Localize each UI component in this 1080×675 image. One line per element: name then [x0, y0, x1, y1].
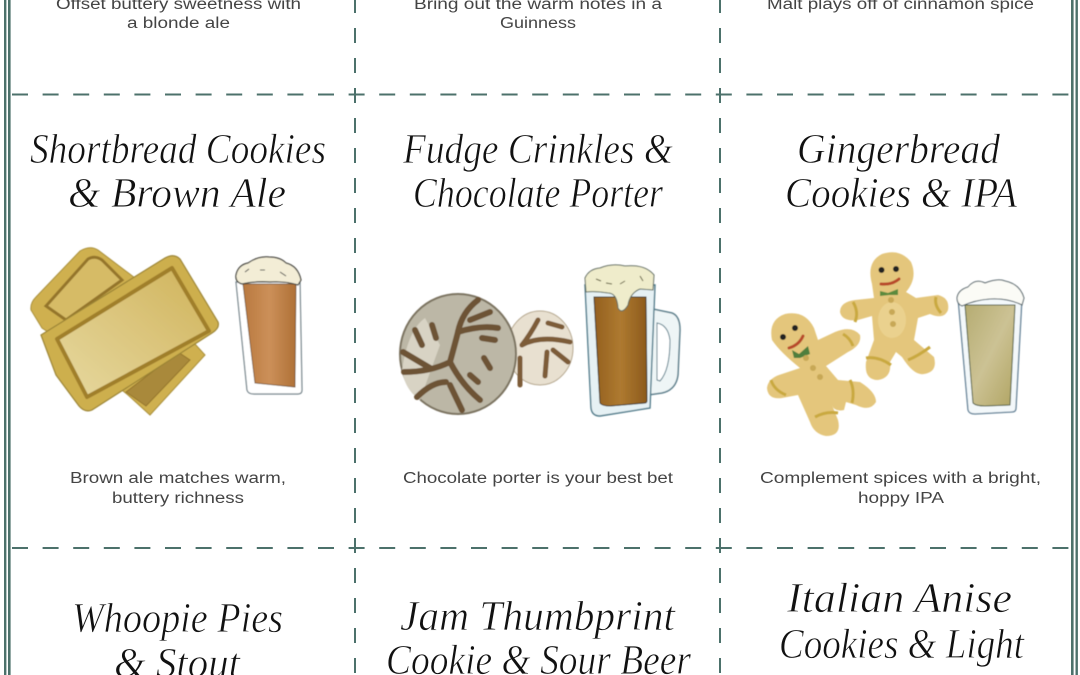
- text: gingerbread description: Complement spices with a bright,: [760, 470, 1041, 487]
- title: Gingerbread Cookies and IPA: Cookies & IPA: [785, 171, 1017, 217]
- title: Shortbread Cookies and Brown Ale: Shortbread Cookies: [30, 127, 326, 173]
- title: Jam Thumbprint Cookie and Sour Beer: Jam Thumbprint: [400, 594, 676, 640]
- title: Italian Anise Cookies and Light Lager: Italian Anise: [786, 576, 1012, 622]
- text: fudge crinkle description: Chocolate porter is your best bet: [403, 470, 674, 487]
- title: Gingerbread Cookies and IPA: Gingerbread: [797, 127, 1001, 173]
- text: gingerbread description: hoppy IPA: [858, 490, 945, 507]
- title: Shortbread Cookies and Brown Ale: & Brown Ale: [68, 171, 286, 217]
- text: top row left: a blonde ale: [127, 15, 230, 32]
- text: shortbread description: buttery richness: [112, 490, 244, 507]
- text: top row middle: Guinness: [500, 15, 576, 32]
- illustration: gingerbread man front: [767, 313, 876, 436]
- illustration: brown ale glass: [236, 257, 302, 394]
- title: Whoopie Pies and Stout: Whoopie Pies: [72, 596, 283, 642]
- text: shortbread description: Brown ale matches warm,: [70, 470, 286, 487]
- illustration: gingerbread man back: [840, 252, 948, 380]
- title: Italian Anise Cookies and Light Lager: Cookies & Light: [779, 622, 1025, 668]
- page border: double left: [4, 0, 11, 675]
- page border: double right: [1071, 0, 1078, 675]
- title: Fudge Crinkles and Chocolate Porter: Chocolate Porter: [413, 171, 664, 217]
- illustration: fudge crinkle cookies: [400, 294, 573, 414]
- title: Fudge Crinkles and Chocolate Porter: Fudge Crinkles &: [402, 127, 673, 173]
- illustration: IPA glass: [957, 280, 1024, 414]
- illustration: shortbread cookies: [31, 248, 218, 415]
- illustration: chocolate porter mug: [585, 265, 680, 416]
